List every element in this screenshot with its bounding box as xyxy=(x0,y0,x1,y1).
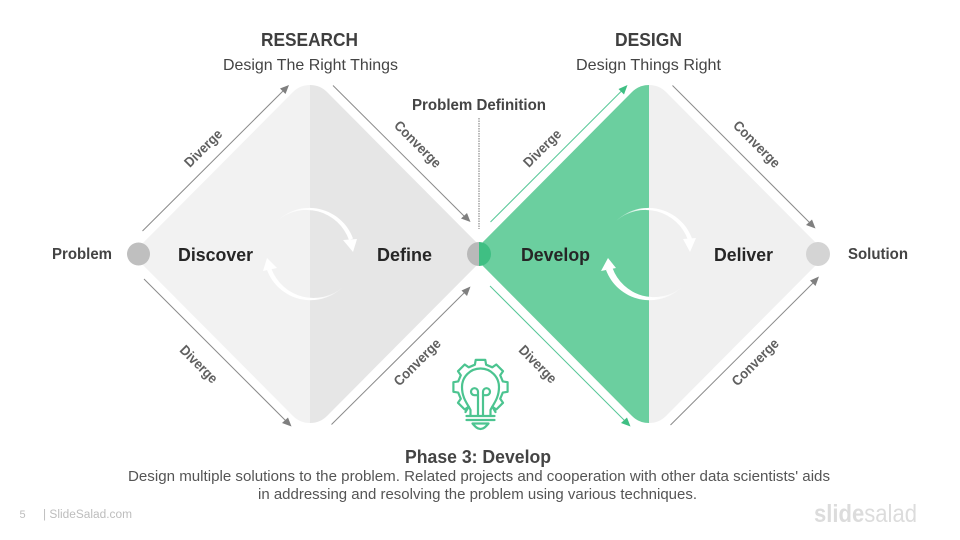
heading: research: RESEARCH xyxy=(261,30,358,50)
icon: cycle arrows research xyxy=(263,208,357,300)
arrow: converge upper design xyxy=(672,86,816,228)
diamond: design xyxy=(471,85,827,423)
heading: design: Design Things Right xyxy=(576,57,722,74)
footer: page number: 5 xyxy=(19,509,26,521)
arrow: diverge upper design xyxy=(490,85,628,222)
arrow: converge lower design xyxy=(670,276,819,425)
node: solution xyxy=(806,242,830,266)
icon: gear light bulb xyxy=(453,360,508,429)
heading: design xyxy=(576,30,722,74)
description text xyxy=(128,469,830,503)
heading: research: Design The Right Things xyxy=(223,57,398,74)
arrow: converge upper research xyxy=(333,86,470,222)
label: diverge upper research: Diverge xyxy=(181,126,225,170)
heading: phase 3: Phase 3: Develop xyxy=(405,447,551,467)
label: converge lower research: Converge xyxy=(390,335,444,389)
stage: define: Define xyxy=(377,244,432,265)
label: diverge lower design: Diverge xyxy=(516,342,560,386)
icon: cycle arrows design xyxy=(601,208,696,300)
node: problem xyxy=(127,242,150,266)
label: diverge lower research: Diverge xyxy=(177,342,221,386)
stage: discover: Discover xyxy=(178,244,253,265)
arrow: diverge upper research xyxy=(142,85,289,231)
label: solution: Solution xyxy=(848,246,908,263)
description text: in addressing and resolving the problem using various techniques. xyxy=(258,487,697,503)
label: converge upper research: Converge xyxy=(391,117,445,171)
label: converge lower design: Converge xyxy=(728,335,782,389)
arrow: diverge lower design xyxy=(490,286,630,426)
stage: deliver: Deliver xyxy=(714,244,773,265)
heading: research xyxy=(223,30,398,74)
arrow: diverge lower research xyxy=(144,279,292,426)
label: problem definition: Problem Definition xyxy=(412,97,546,114)
logo: slidesalad: slidesalad xyxy=(814,500,917,528)
stage: develop: Develop xyxy=(521,244,590,265)
description text: Design multiple solutions to the problem. Related projects and cooperation with other data scientists' aids xyxy=(128,469,830,485)
diamond: research xyxy=(132,85,488,423)
label: diverge upper design: Diverge xyxy=(520,126,564,170)
heading: design: DESIGN xyxy=(615,30,682,50)
label: converge upper design: Converge xyxy=(730,117,784,171)
arrow: converge lower research xyxy=(332,286,470,424)
label: problem: Problem xyxy=(52,246,112,263)
footer: site name: | SlideSalad.com xyxy=(43,509,132,521)
node: problem definition xyxy=(467,242,491,266)
dotted leader line xyxy=(478,118,480,229)
